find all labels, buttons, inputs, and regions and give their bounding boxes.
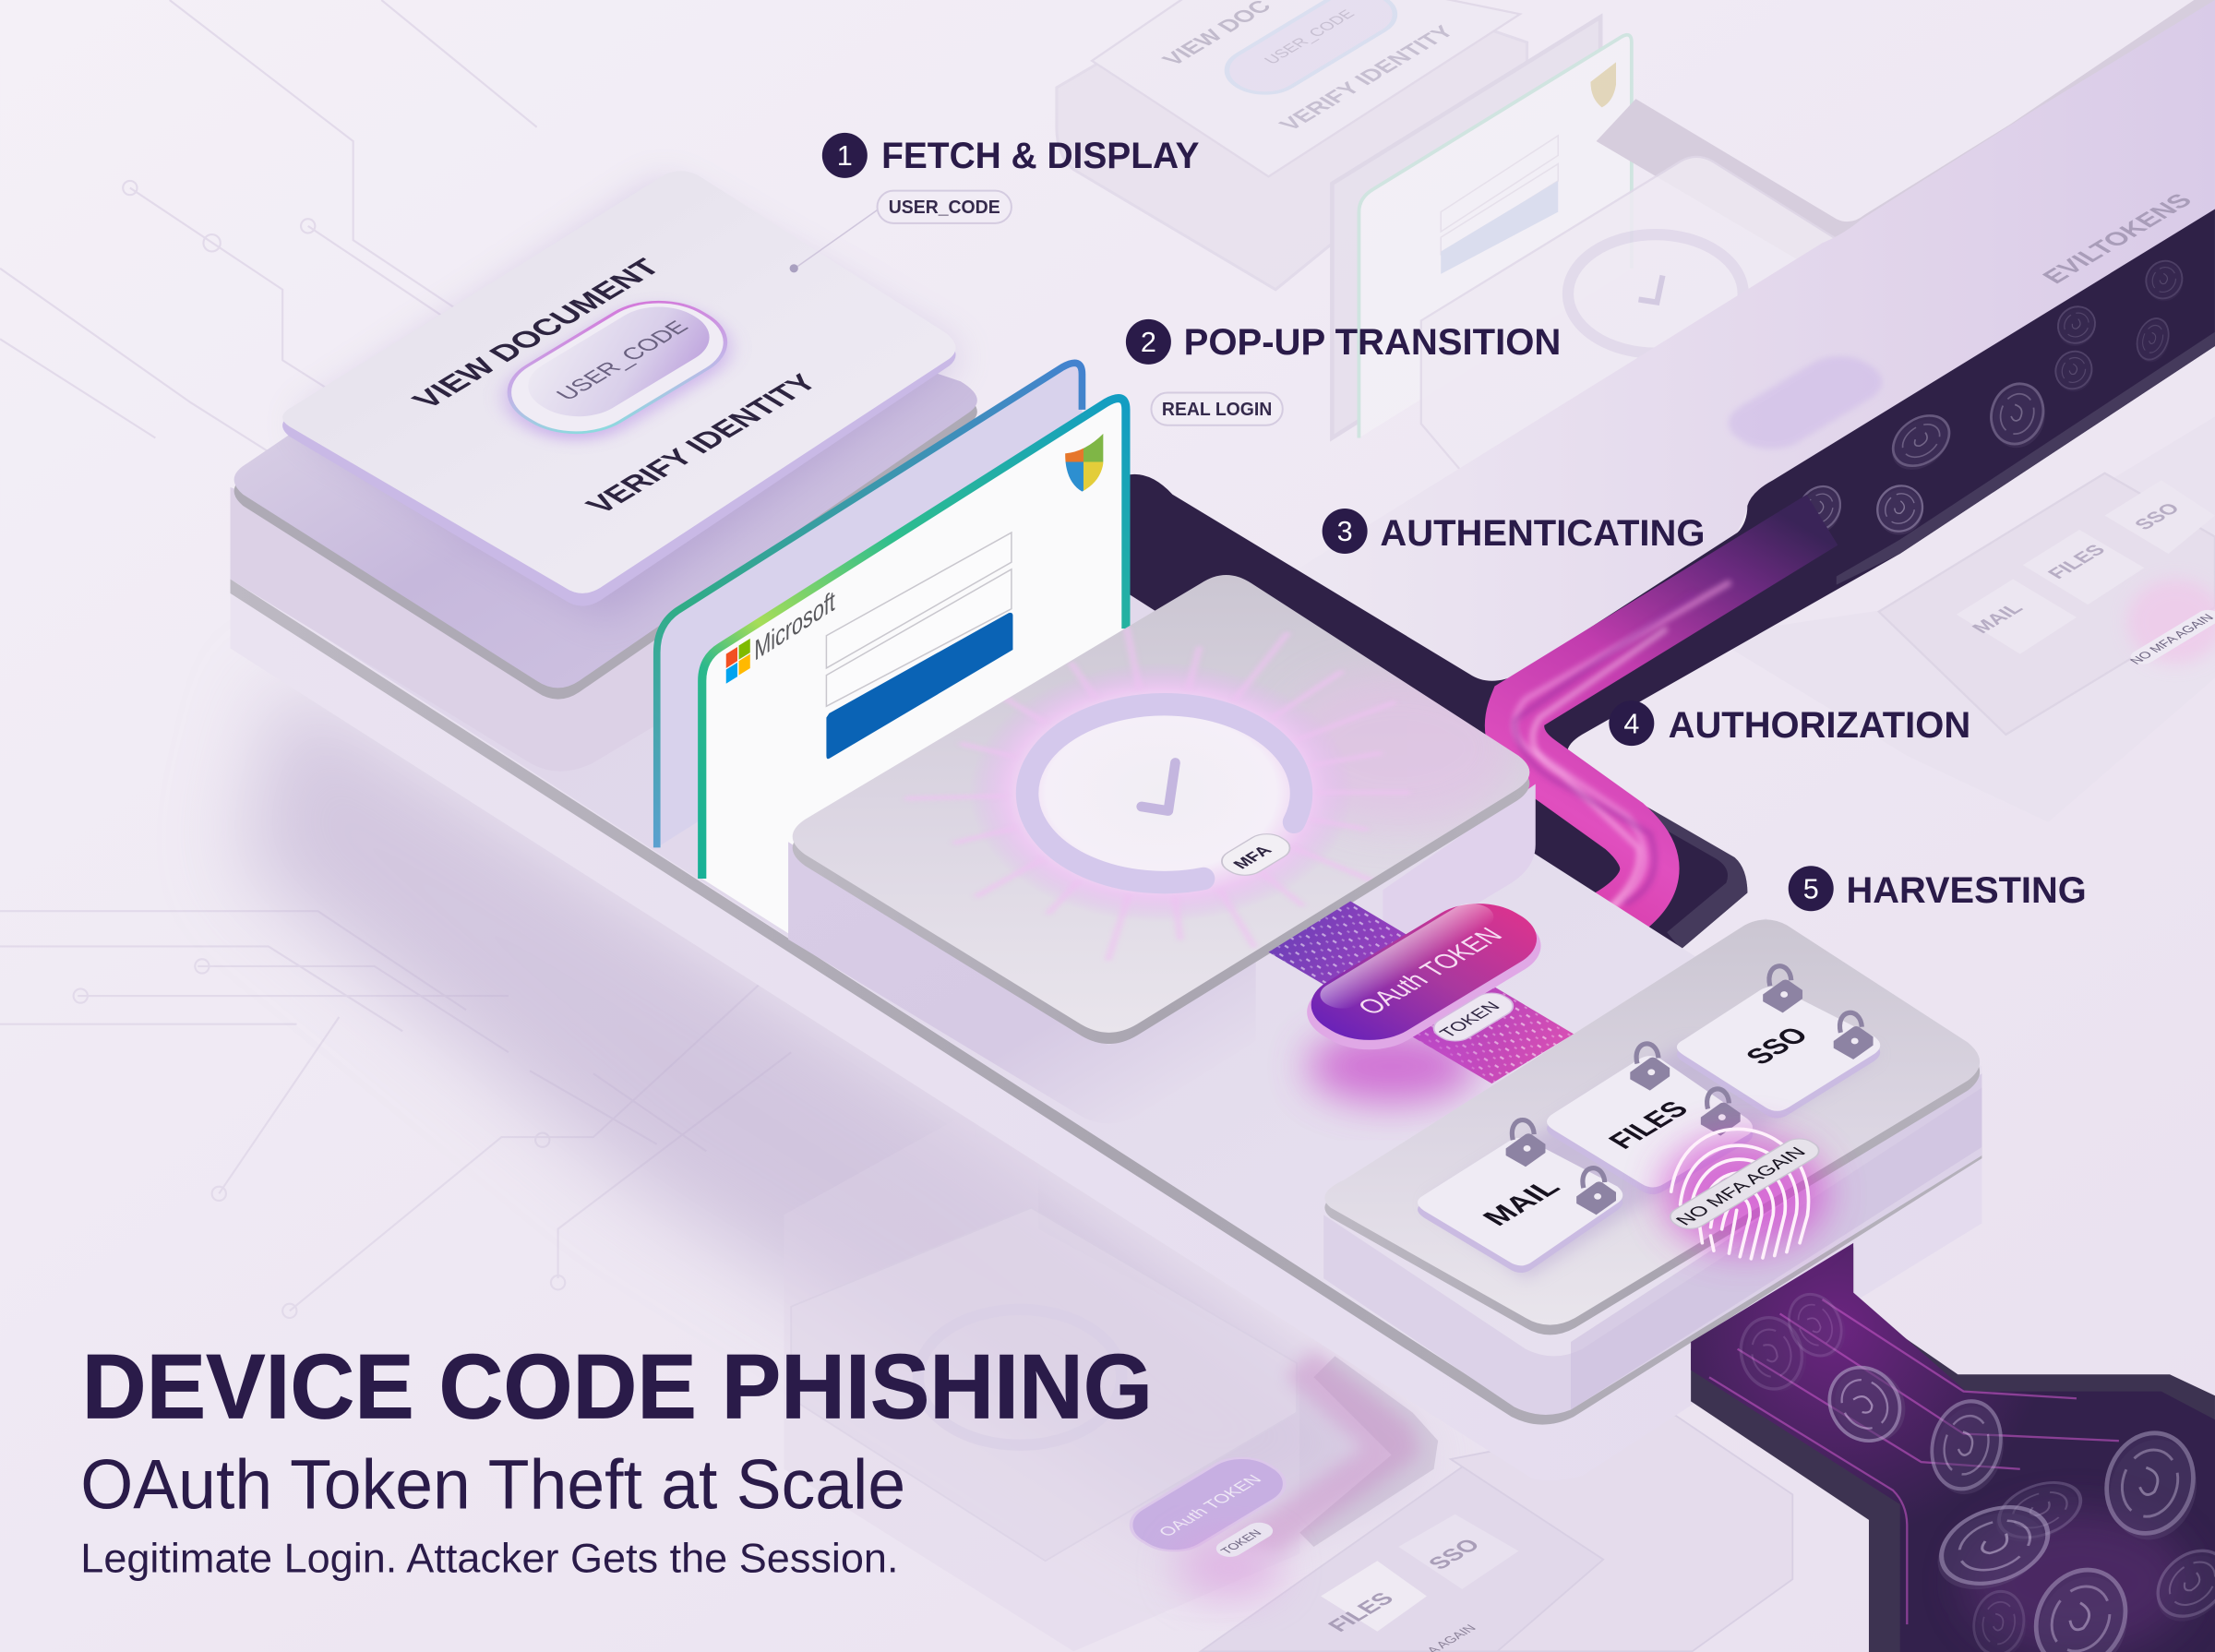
harvest plate top [1324, 919, 1980, 1325]
top card: view document [282, 171, 956, 606]
tile: files: FILES [1601, 1096, 1695, 1154]
login window: back pane [657, 363, 1082, 847]
card heading: verify identity: VERIFY IDENTITY [579, 369, 825, 519]
MFA chip [1214, 829, 1299, 880]
dark token channel: upper [1130, 209, 2215, 950]
ghost MFA block: top right [1421, 157, 1845, 480]
ghost flow: bottom: TOKEN [1217, 1527, 1264, 1556]
step 2 label: POP-UP TRANSITION [1184, 322, 1561, 363]
card heading: view document: VIEW DOCUMENT [405, 254, 668, 413]
leader dot [790, 209, 879, 272]
tagline: Legitimate Login. Attacker Gets the Session. [80, 1537, 898, 1582]
token chip [1426, 988, 1521, 1046]
chip: real login: REAL LOGIN [1162, 400, 1272, 420]
step 4 label: AUTHORIZATION [1669, 705, 1970, 746]
coins: upper channel [1789, 255, 2191, 544]
ghost pill on upper right panel [1713, 347, 1898, 459]
dark token channel: lower [1691, 1243, 2215, 1652]
icon: shield [1065, 434, 1104, 491]
user_code pill: USER_CODE [551, 317, 694, 404]
tile: mail [1418, 1138, 1622, 1273]
ground shadow under platform [240, 678, 1441, 1539]
step 1 label: FETCH & DISPLAY [881, 136, 1199, 176]
title: DEVICE CODE PHISHING [82, 1336, 1153, 1439]
ghost harvest block: right: SSO [2130, 500, 2185, 533]
tile: sso [1677, 987, 1880, 1118]
data strip under token [1268, 902, 1574, 1083]
step 5 label: 5 [1803, 873, 1819, 904]
channel lower edge highlight [1561, 332, 2215, 950]
lock icons [1506, 966, 1874, 1215]
ghost flow: bottom [784, 1108, 1792, 1652]
harvest block [1323, 919, 1982, 1415]
no mfa again chip [1663, 1134, 1826, 1233]
chip: user_code: USER_CODE [889, 198, 1000, 218]
ghost flow: bottom: SSO [1423, 1536, 1486, 1574]
upper right light panel [1293, 0, 2215, 681]
step 3 label: AUTHENTICATING [1380, 513, 1705, 554]
OAuth token pill: OAuth TOKEN [1350, 923, 1509, 1019]
no mfa again chip: NO MFA AGAIN [1671, 1144, 1811, 1228]
login fields [826, 533, 1012, 706]
timer ring [1027, 704, 1301, 882]
circuit trace background [0, 0, 791, 1318]
ghost layer: top right repeated flow: USER_CODE [1261, 7, 1359, 66]
ghost harvest block: right: MAIL [1968, 600, 2028, 637]
chip: user_code [878, 191, 1012, 223]
step 5 label: HARVESTING [1846, 870, 2087, 911]
chip: real login [1151, 392, 1283, 425]
microsoft logo [726, 584, 835, 684]
beam rim [231, 580, 1982, 1425]
main platform beam: side wall [231, 582, 1982, 1480]
platform 1: fetch and display [231, 171, 1982, 1425]
ghost dark channel: upper right [1597, 0, 2215, 282]
ghost flow: bottom: FILES [1323, 1589, 1400, 1635]
fingerprint glow [1663, 1137, 1826, 1251]
user_code pill [479, 286, 756, 457]
ghost harvest block: right: FILES [2043, 542, 2110, 582]
plate rim [793, 586, 1529, 1044]
token glow [1307, 1030, 1476, 1103]
harvest side [1323, 1088, 1982, 1415]
step 1 label: 1 [837, 140, 853, 172]
icon: clock hands [1142, 763, 1175, 811]
step 2 label: 2 [1141, 327, 1156, 358]
subtitle: OAuth Token Theft at Scale [80, 1446, 905, 1525]
login window: front pane [702, 399, 1126, 935]
slab [234, 247, 977, 700]
microsoft logo: Microsoft [754, 584, 835, 667]
EVILTOKENS ghost label: EVILTOKENS [2036, 189, 2198, 287]
plate glow and rays [907, 628, 1518, 959]
harvest rim [1324, 929, 1980, 1335]
ghost layer: top right repeated flow: VERIFY IDENTITY [1275, 22, 1460, 135]
block side right translucent [1383, 784, 1536, 961]
translucent lower block [231, 424, 735, 772]
ghost harvest block: right: NO MFA AGAIN [2126, 612, 2215, 666]
ghost flow: bottom: OAuth TOKEN [1154, 1472, 1265, 1539]
token chip: TOKEN [1436, 1000, 1504, 1041]
OAuth token pill [1284, 891, 1563, 1063]
ghost layer: top right repeated flow [1057, 0, 1632, 437]
icon: fingerprint [1662, 1119, 1820, 1267]
tile: sso: SSO [1739, 1023, 1815, 1069]
block side left [788, 842, 1256, 1124]
main platform beam: top surface [231, 296, 1982, 1417]
magenta token stream [1515, 520, 1822, 975]
step 4 label: 4 [1623, 708, 1639, 739]
tile: files [1547, 1056, 1753, 1194]
MFA block [788, 575, 1536, 1124]
login button [826, 613, 1012, 759]
MFA chip: MFA [1228, 843, 1275, 871]
tile: mail: MAIL [1476, 1175, 1567, 1230]
ghost harvest block: right [1709, 417, 2215, 822]
step 3 label: 3 [1337, 516, 1353, 547]
plate top [793, 575, 1529, 1033]
